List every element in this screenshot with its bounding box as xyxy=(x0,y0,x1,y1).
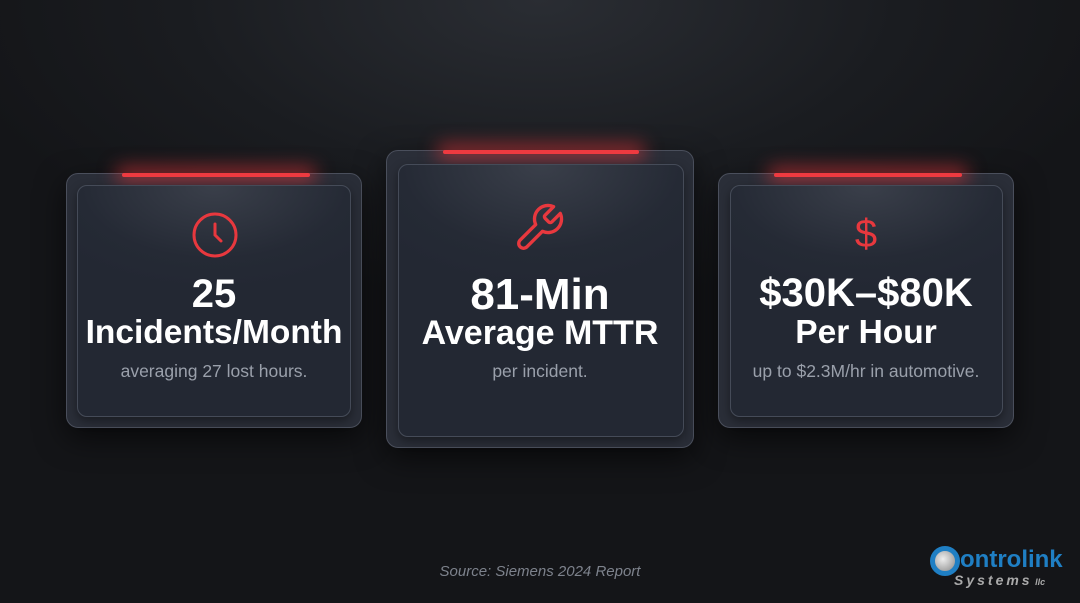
panel: MTTR xyxy=(386,150,694,448)
subtext: averaging 27 lost hours. xyxy=(121,361,307,381)
panel: incidents xyxy=(66,173,362,428)
icon: wrench xyxy=(517,204,564,250)
logo: Systems llc xyxy=(954,572,1045,588)
logo xyxy=(930,546,1063,588)
logo: ontrolink xyxy=(960,546,1063,573)
stat value: 81-Min xyxy=(470,270,610,319)
icon: clock xyxy=(192,212,238,258)
stat value: $30K–$80K xyxy=(759,271,973,315)
subtext: per incident. xyxy=(492,361,588,381)
stat label: Per Hour xyxy=(795,314,937,351)
stat value: 25 xyxy=(192,272,236,316)
source note: Source: Siemens 2024 Report xyxy=(440,563,640,580)
panel: cost xyxy=(718,173,1014,428)
icon: dollar: $ xyxy=(855,212,877,256)
subtext: up to $2.3M/hr in automotive. xyxy=(753,361,979,381)
stat label: Average MTTR xyxy=(422,314,658,352)
stat label: Incidents/Month xyxy=(86,314,342,351)
